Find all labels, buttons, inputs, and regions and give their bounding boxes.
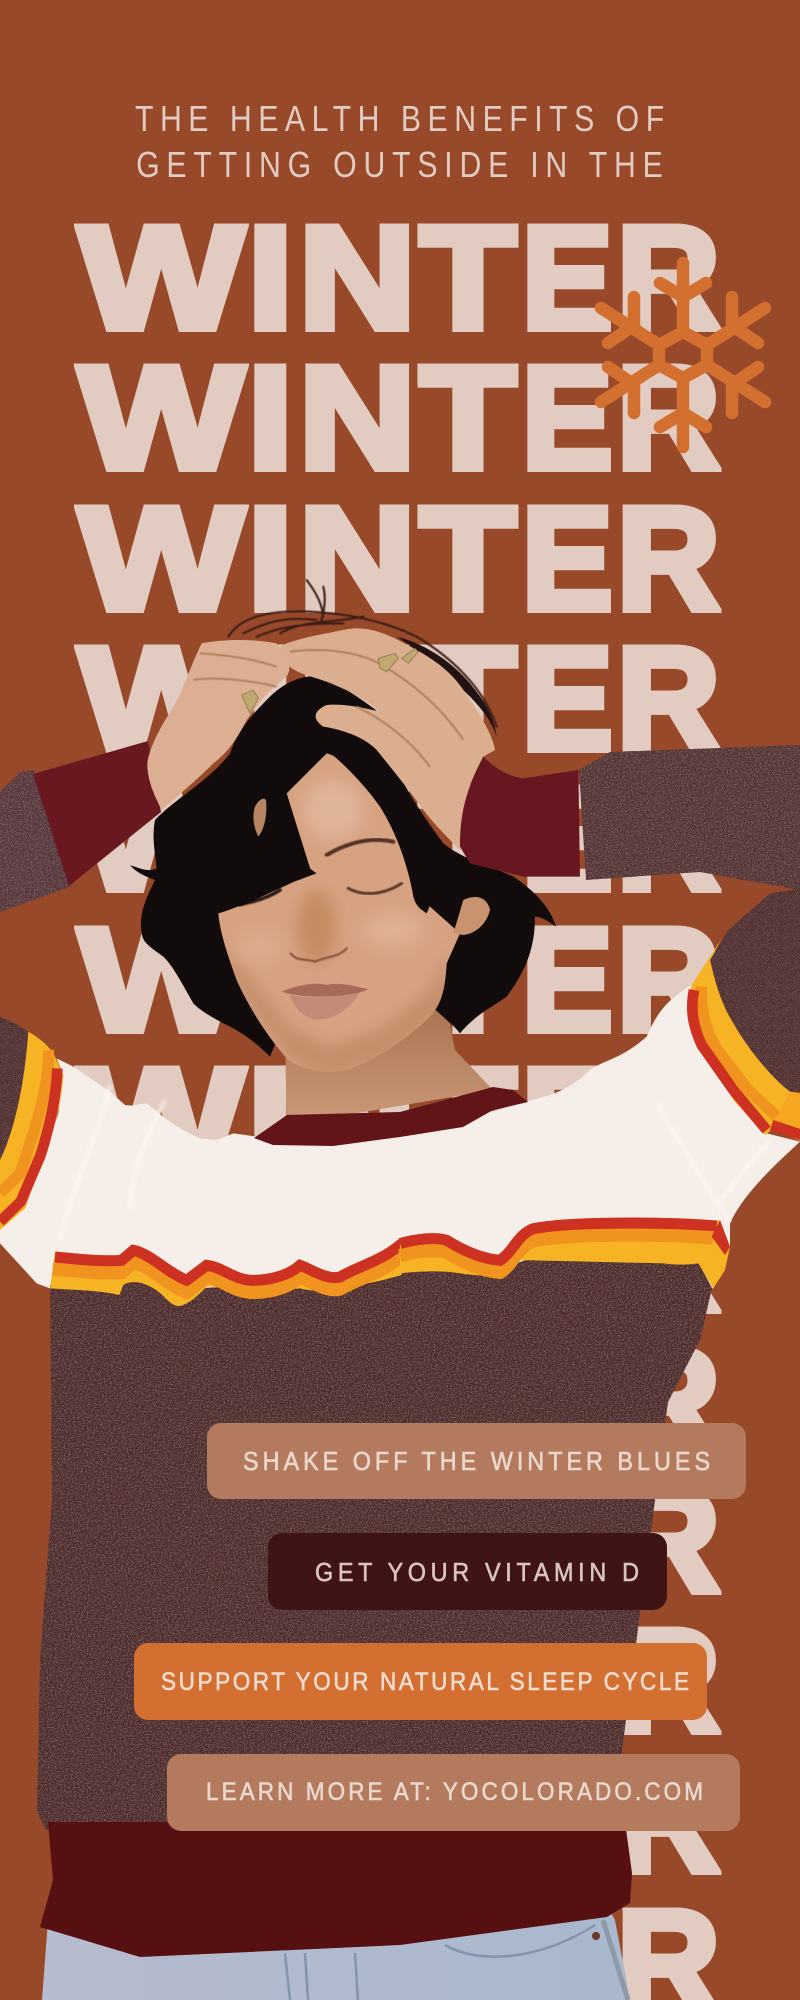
winter row 5: I xyxy=(248,757,293,920)
winter row 3: T xyxy=(420,477,516,640)
right upper sleeve with stripes xyxy=(691,888,800,1142)
right forearm sleeve xyxy=(579,745,800,890)
winter row 3: N xyxy=(299,477,416,640)
right hand xyxy=(277,628,495,850)
face shading xyxy=(213,780,450,1080)
winter row 4 xyxy=(74,617,721,780)
winter row 8 xyxy=(79,1178,722,1341)
winter row 6: I xyxy=(248,898,293,1061)
winter row 3 xyxy=(74,477,722,640)
winter row 12: N xyxy=(299,1739,416,1902)
chest stripes, right half xyxy=(400,1218,730,1288)
winter row 7: W xyxy=(79,1038,243,1201)
winter row 11: R xyxy=(617,1599,720,1762)
neck xyxy=(285,1000,493,1125)
winter row 11: W xyxy=(79,1599,243,1762)
winter row 10: I xyxy=(248,1459,293,1622)
winter row 7 xyxy=(74,1038,720,1201)
winter row 6 xyxy=(74,898,720,1061)
white chest and sleeves, left half xyxy=(0,1058,402,1293)
winter row 8: R xyxy=(617,1178,720,1341)
winter row 2: E xyxy=(522,336,613,499)
left cuff xyxy=(33,741,161,886)
winter row 5: N xyxy=(299,757,416,920)
winter row 7: I xyxy=(248,1038,293,1201)
winter row 8: E xyxy=(522,1178,613,1341)
sweater hem xyxy=(40,1822,632,1957)
winter row 1: E xyxy=(522,196,613,359)
winter row 7: T xyxy=(420,1038,516,1201)
winter row 5 xyxy=(79,757,722,920)
right cuff xyxy=(460,757,580,877)
winter row 8: N xyxy=(299,1178,416,1341)
winter row 4: N xyxy=(299,617,416,780)
pill: learn more at yocolorado.com: LEARN MORE AT: YOCOLORADO.COM xyxy=(206,1778,703,1806)
winter row 9: N xyxy=(299,1318,416,1481)
winter row 3: E xyxy=(522,477,613,640)
nose xyxy=(291,948,347,962)
pill: shake off the winter blues: SHAKE OFF THE WINTER BLUES xyxy=(243,1448,710,1476)
winter row 2 xyxy=(74,336,722,499)
winter row 10 xyxy=(79,1459,722,1622)
winter row 8: W xyxy=(79,1178,243,1341)
sweater collar xyxy=(254,1087,528,1146)
eyebrow and eyes xyxy=(237,840,402,905)
skin gap in fringe xyxy=(253,799,266,837)
title: THE HEALTH BENEFITS OF xyxy=(135,100,664,140)
hair wisp above right hand xyxy=(397,637,497,737)
flyaway hair xyxy=(228,580,497,727)
winter row 4: W xyxy=(79,617,243,780)
winter row 8: T xyxy=(420,1178,516,1341)
winter row 10: R xyxy=(617,1459,720,1622)
winter row 1 xyxy=(74,196,722,359)
winter row 10: N xyxy=(299,1459,416,1622)
winter row 12 xyxy=(79,1739,722,1902)
rings xyxy=(242,648,418,713)
sweater body xyxy=(37,1255,712,1830)
front fringe xyxy=(220,750,327,907)
winter row 10: W xyxy=(79,1459,243,1622)
winter row 4: I xyxy=(248,617,293,780)
winter row 12: E xyxy=(522,1739,613,1902)
winter row 4: T xyxy=(420,617,516,780)
pill: get your vitamin d xyxy=(268,1533,667,1610)
winter row 3: W xyxy=(79,477,243,640)
winter row 1: R xyxy=(617,196,720,359)
head group xyxy=(130,580,580,1080)
winter row 2: W xyxy=(79,336,243,499)
winter row 7: N xyxy=(299,1038,416,1201)
winter row 5: W xyxy=(79,757,243,920)
winter row 11: I xyxy=(248,1599,293,1762)
winter row 9 xyxy=(79,1318,720,1481)
left forearm sleeve xyxy=(0,770,72,912)
winter row 11: N xyxy=(299,1599,416,1762)
winter row 9: I xyxy=(248,1318,293,1481)
winter row 2: I xyxy=(248,336,293,499)
winter row 11 xyxy=(79,1599,722,1762)
left hand xyxy=(147,640,289,810)
winter row 13 xyxy=(79,1880,720,2000)
title xyxy=(135,100,664,186)
winter row 8: I xyxy=(248,1178,293,1341)
winter row 5: T xyxy=(420,757,516,920)
winter row 6: N xyxy=(299,898,416,1061)
pill: shake off the winter blues xyxy=(207,1423,746,1499)
white chest and sleeves, right half xyxy=(398,985,800,1288)
ear xyxy=(453,897,490,935)
winter row 5: E xyxy=(522,757,613,920)
winter row 1: N xyxy=(299,196,416,359)
winter row 10: E xyxy=(522,1459,613,1622)
winter row 6: E xyxy=(522,898,613,1061)
winter row 4: E xyxy=(522,617,613,780)
hair back mass xyxy=(130,676,556,1057)
left upper sleeve with stripes xyxy=(0,1017,63,1230)
winter row 9: T xyxy=(420,1318,516,1481)
winter row 9: E xyxy=(522,1318,613,1481)
pill: learn more at yocolorado.com xyxy=(167,1754,740,1831)
winter row 2: N xyxy=(299,336,416,499)
winter row 2: T xyxy=(420,336,516,499)
winter row 2: R xyxy=(617,336,720,499)
winter row 11: T xyxy=(420,1599,516,1762)
winter row 7: E xyxy=(522,1038,613,1201)
winter row 6: R xyxy=(617,898,720,1061)
winter row 11: E xyxy=(522,1599,613,1762)
winter row 5: R xyxy=(617,757,720,920)
winter row 12: W xyxy=(79,1739,243,1902)
face xyxy=(218,753,460,1072)
white fabric folds xyxy=(60,1085,770,1240)
hair strand right of face xyxy=(327,733,436,913)
pill: support your natural sleep cycle xyxy=(134,1643,707,1720)
winter row 6: T xyxy=(420,898,516,1061)
winter row 1: W xyxy=(79,196,243,359)
winter row 4: R xyxy=(617,617,720,780)
winter row 1: I xyxy=(248,196,293,359)
pill: support your natural sleep cycle: SUPPORT YOUR NATURAL SLEEP CYCLE xyxy=(161,1668,689,1696)
winter row 3: R xyxy=(617,477,720,640)
winter row 12: I xyxy=(248,1739,293,1902)
winter row 3: I xyxy=(248,477,293,640)
winter row 9: R xyxy=(617,1318,720,1481)
winter row 7: R xyxy=(617,1038,720,1201)
winter row 12: T xyxy=(420,1739,516,1902)
winter row 12: R xyxy=(617,1739,720,1902)
title: GETTING OUTSIDE IN THE xyxy=(136,146,663,186)
chest stripes, left half xyxy=(50,1238,402,1306)
jeans xyxy=(42,1905,630,2000)
photo: woman in retro sweater xyxy=(0,578,800,2000)
winter row 1: T xyxy=(420,196,516,359)
winter row 9: W xyxy=(79,1318,243,1481)
icon: snowflake xyxy=(594,256,772,454)
lips xyxy=(282,984,368,1019)
pill: get your vitamin d: GET YOUR VITAMIN D xyxy=(315,1559,639,1587)
winter row 6: W xyxy=(79,898,243,1061)
winter row 10: T xyxy=(420,1459,516,1622)
